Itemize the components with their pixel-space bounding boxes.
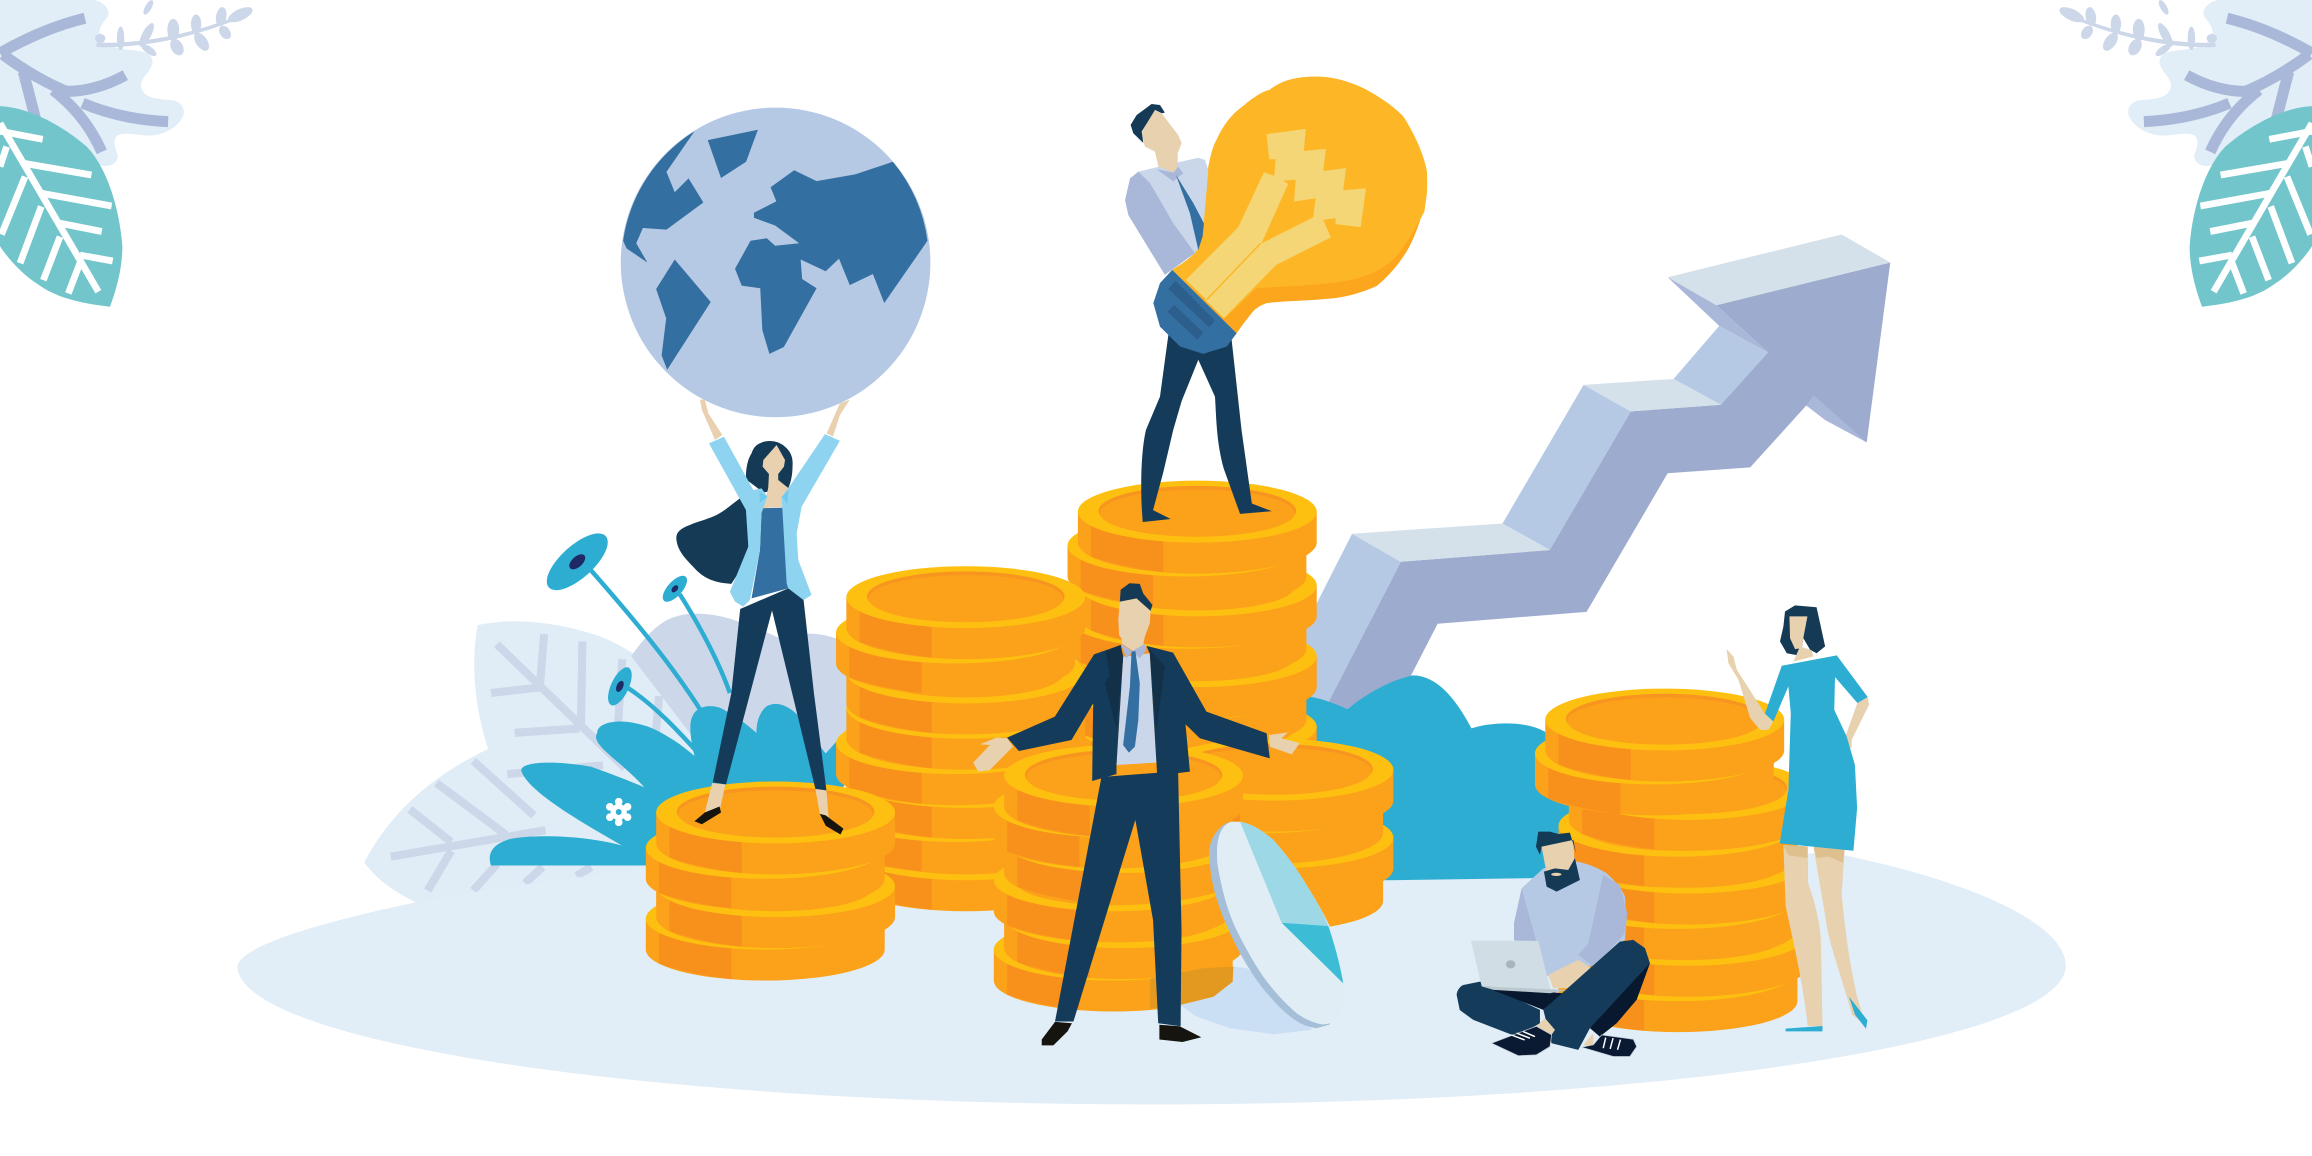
bulb shadow: [1172, 77, 1427, 333]
woman in blue dress: [1727, 605, 1869, 1031]
laptop base: [1482, 986, 1567, 993]
trousers: [1141, 335, 1272, 522]
legs: [1783, 845, 1866, 1026]
corner foliage top left: [0, 0, 255, 307]
light blue jacket: [709, 434, 840, 607]
pie slice dark: [1282, 923, 1343, 983]
socket stripes: [1167, 281, 1215, 340]
hair: [1120, 583, 1152, 611]
pill ground shadow: [1180, 967, 1312, 1034]
blue leaves: [490, 704, 849, 866]
coin stack right of centre: [1144, 739, 1393, 932]
neck: [1793, 646, 1813, 661]
front leg: [1543, 940, 1650, 1050]
flower heads: [538, 524, 691, 709]
coin stack back left: [836, 566, 1085, 911]
mouth: [1551, 873, 1561, 876]
lower leg shade: [1590, 963, 1650, 1037]
raised arm: [1727, 649, 1773, 730]
dress: [1765, 655, 1868, 851]
filament: [1186, 129, 1366, 318]
face and neck: [1118, 598, 1151, 651]
face and neck: [763, 445, 788, 508]
shoe stripes: [1511, 1032, 1620, 1050]
arrow head shades: [1668, 277, 1867, 442]
ground ellipse: [237, 852, 2066, 1104]
tie: [1176, 175, 1204, 250]
forearms: [700, 400, 850, 440]
arm: [1125, 172, 1195, 275]
hands: [973, 732, 1300, 772]
hair: [1131, 104, 1165, 143]
coin shadow overlay: [1150, 967, 1233, 1009]
woman holding globe: [676, 400, 850, 835]
right sleeve: [1578, 875, 1627, 967]
laptop logo: [1506, 960, 1515, 968]
forearm: [1548, 960, 1592, 988]
coin stack front centre: [994, 745, 1243, 1012]
flower stems: [591, 571, 730, 770]
filament inner gap: [1262, 180, 1316, 243]
pale back leaves with veins: [364, 621, 708, 902]
thigh shadow: [1783, 845, 1845, 863]
man in suit: [973, 583, 1300, 1045]
face and neck: [1142, 110, 1182, 173]
tilted pie pill: [1150, 822, 1343, 1034]
ankles: [703, 783, 829, 818]
dark thigh under laptop: [1483, 986, 1563, 1010]
lapels: [1105, 645, 1165, 730]
globe: [621, 108, 930, 417]
top: [752, 508, 788, 598]
hair: [1780, 605, 1825, 656]
coin stack back centre: [1068, 481, 1317, 789]
shirt: [1138, 158, 1208, 255]
shoes: [1786, 997, 1867, 1031]
pill edge: [1209, 822, 1330, 1028]
blue bush right: [1298, 675, 1592, 880]
bulb body: [1172, 77, 1427, 318]
shirt: [1116, 653, 1156, 765]
long hair: [676, 494, 755, 584]
plant group left: [490, 524, 849, 866]
small white flower: [606, 798, 631, 826]
trousers: [1055, 771, 1182, 1026]
collar: [1157, 167, 1183, 181]
corner foliage top right: [2057, 0, 2312, 307]
tie: [1123, 651, 1140, 753]
arrow front face: [1329, 262, 1890, 722]
laptop: [1471, 941, 1551, 990]
grey bush: [631, 614, 849, 756]
lower pale leaf: [364, 749, 693, 902]
left sleeve: [1514, 888, 1536, 942]
man sitting with laptop: [1457, 832, 1650, 1056]
shoes: [1042, 1022, 1201, 1045]
hair: [1536, 832, 1576, 855]
trousers: [713, 588, 826, 790]
head hair: [746, 441, 793, 492]
man holding bulb: [1125, 104, 1272, 522]
arrow light faces: [1305, 326, 1768, 702]
pill face: [1217, 822, 1343, 1024]
ankles: [1536, 1018, 1593, 1047]
jacket: [1007, 645, 1270, 781]
collar accents: [759, 490, 788, 504]
shirt: [1514, 862, 1627, 977]
face: [1789, 616, 1807, 649]
left shin: [1457, 982, 1540, 1037]
filament thin line: [1207, 243, 1261, 300]
coin stack right: [1535, 689, 1808, 1032]
pie slice light: [1240, 822, 1328, 926]
light bulb: [1172, 77, 1427, 333]
shoes: [694, 807, 843, 835]
hip arm: [1844, 697, 1869, 748]
collar: [1121, 644, 1147, 658]
face: [1542, 840, 1575, 873]
arrow top faces: [1352, 234, 1890, 562]
continents: [623, 130, 927, 370]
beard: [1544, 858, 1580, 892]
bulb socket: [1153, 270, 1237, 354]
growth arrow: [1305, 234, 1890, 722]
upper pale leaf: [474, 621, 708, 826]
coin stack front left: [646, 781, 895, 981]
shoes: [1492, 1026, 1637, 1056]
